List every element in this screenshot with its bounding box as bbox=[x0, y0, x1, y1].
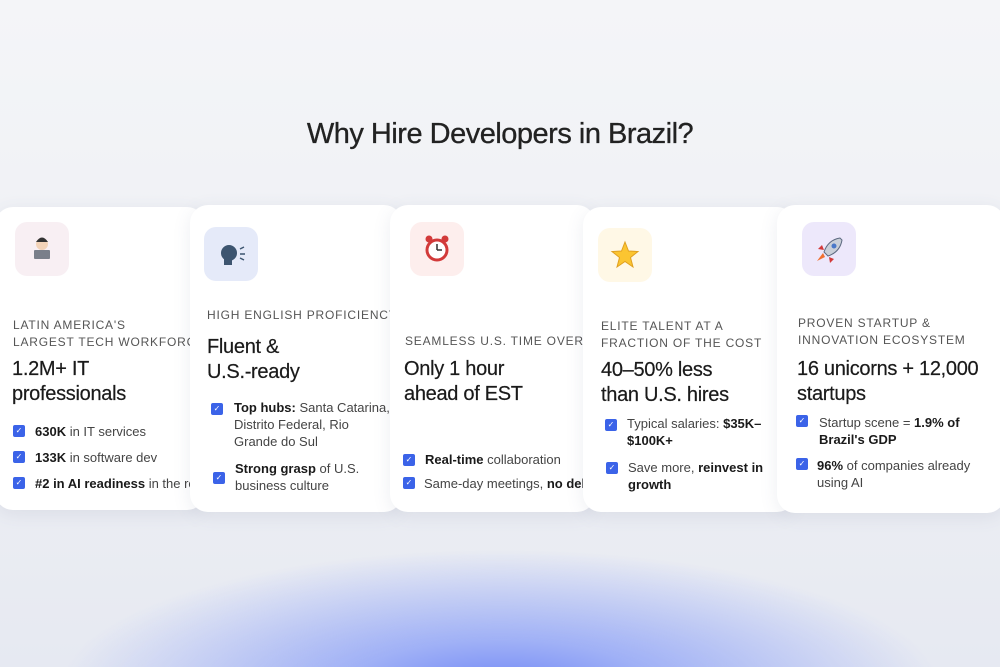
label: INNOVATION ECOSYSTEM bbox=[798, 333, 966, 347]
heading: than U.S. hires bbox=[601, 384, 729, 406]
heading bbox=[207, 336, 300, 383]
bullets: ✓ bbox=[406, 478, 412, 487]
heading: ahead of EST bbox=[404, 383, 523, 405]
heading: 16 unicorns + 12,000 bbox=[797, 358, 978, 380]
label: LATIN AMERICA'S bbox=[13, 318, 126, 332]
bullets: ✓ bbox=[214, 404, 220, 413]
label: LARGEST TECH WORKFORCE bbox=[13, 335, 205, 349]
bullets: using AI bbox=[817, 475, 863, 490]
bullets: growth bbox=[628, 477, 671, 492]
label bbox=[798, 316, 966, 347]
label: HIGH ENGLISH PROFICIENCY bbox=[207, 308, 398, 322]
bullets: $100K+ bbox=[627, 433, 673, 448]
bullets: Typical salaries: $35K– bbox=[627, 416, 761, 431]
heading: 40–50% less bbox=[601, 359, 712, 381]
icon: alarm clock bbox=[410, 222, 464, 276]
bullets bbox=[796, 415, 970, 490]
heading: 1.2M+ IT bbox=[12, 358, 89, 380]
bullets: ✓ bbox=[16, 426, 22, 435]
panel: english proficiency bbox=[190, 205, 402, 512]
bullets: Save more, reinvest in bbox=[628, 460, 763, 475]
title: Why Hire Developers in Brazil? bbox=[307, 118, 693, 150]
heading bbox=[12, 358, 126, 405]
bullets bbox=[403, 452, 595, 491]
heading: Only 1 hour bbox=[404, 358, 504, 380]
bullets: business culture bbox=[235, 478, 329, 493]
bullets: Grande do Sul bbox=[234, 434, 318, 449]
bullets: ✓ bbox=[16, 452, 22, 461]
icon: star bbox=[598, 228, 652, 282]
bullets: ✓ bbox=[16, 478, 22, 487]
bullets: Real-time collaboration bbox=[425, 452, 561, 467]
label: ELITE TALENT AT A bbox=[601, 319, 724, 333]
bullets: ✓ bbox=[216, 473, 222, 482]
label bbox=[13, 318, 205, 349]
bullets: Distrito Federal, Rio bbox=[234, 417, 349, 432]
panel: startup ecosystem bbox=[777, 205, 1000, 513]
bullets bbox=[211, 400, 390, 493]
panel: time overlap bbox=[390, 205, 595, 512]
bullets: 630K in IT services bbox=[35, 424, 146, 439]
heading: U.S.-ready bbox=[207, 361, 300, 383]
bullets: Strong grasp of U.S. bbox=[235, 461, 359, 476]
panel: elite talent bbox=[583, 207, 795, 512]
icon: rocket bbox=[802, 222, 856, 276]
icon: speaking head bbox=[204, 227, 258, 281]
label: FRACTION OF THE COST bbox=[601, 336, 762, 350]
label: PROVEN STARTUP & bbox=[798, 316, 931, 330]
bullets: 133K in software dev bbox=[35, 450, 157, 465]
heading: professionals bbox=[12, 383, 126, 405]
bullets: Startup scene = 1.9% of bbox=[819, 415, 960, 430]
heading: Fluent & bbox=[207, 336, 279, 358]
bullets: Top hubs: Santa Catarina, bbox=[234, 400, 390, 415]
heading bbox=[601, 359, 729, 406]
bullets: ✓ bbox=[406, 455, 412, 464]
bullets: 96% of companies already bbox=[817, 458, 970, 473]
heading bbox=[797, 358, 978, 405]
bullets bbox=[13, 424, 205, 491]
bullets: ✓ bbox=[608, 420, 614, 429]
bullets: ✓ bbox=[609, 463, 615, 472]
label bbox=[601, 319, 762, 350]
heading bbox=[404, 358, 523, 405]
bullets: ✓ bbox=[799, 459, 805, 468]
bullets: Brazil's GDP bbox=[819, 432, 897, 447]
panel: largest tech workforce bbox=[0, 207, 205, 510]
bullets: ✓ bbox=[799, 416, 805, 425]
icon: developer bbox=[15, 222, 69, 276]
bullets bbox=[605, 416, 763, 492]
heading: startups bbox=[797, 383, 866, 405]
